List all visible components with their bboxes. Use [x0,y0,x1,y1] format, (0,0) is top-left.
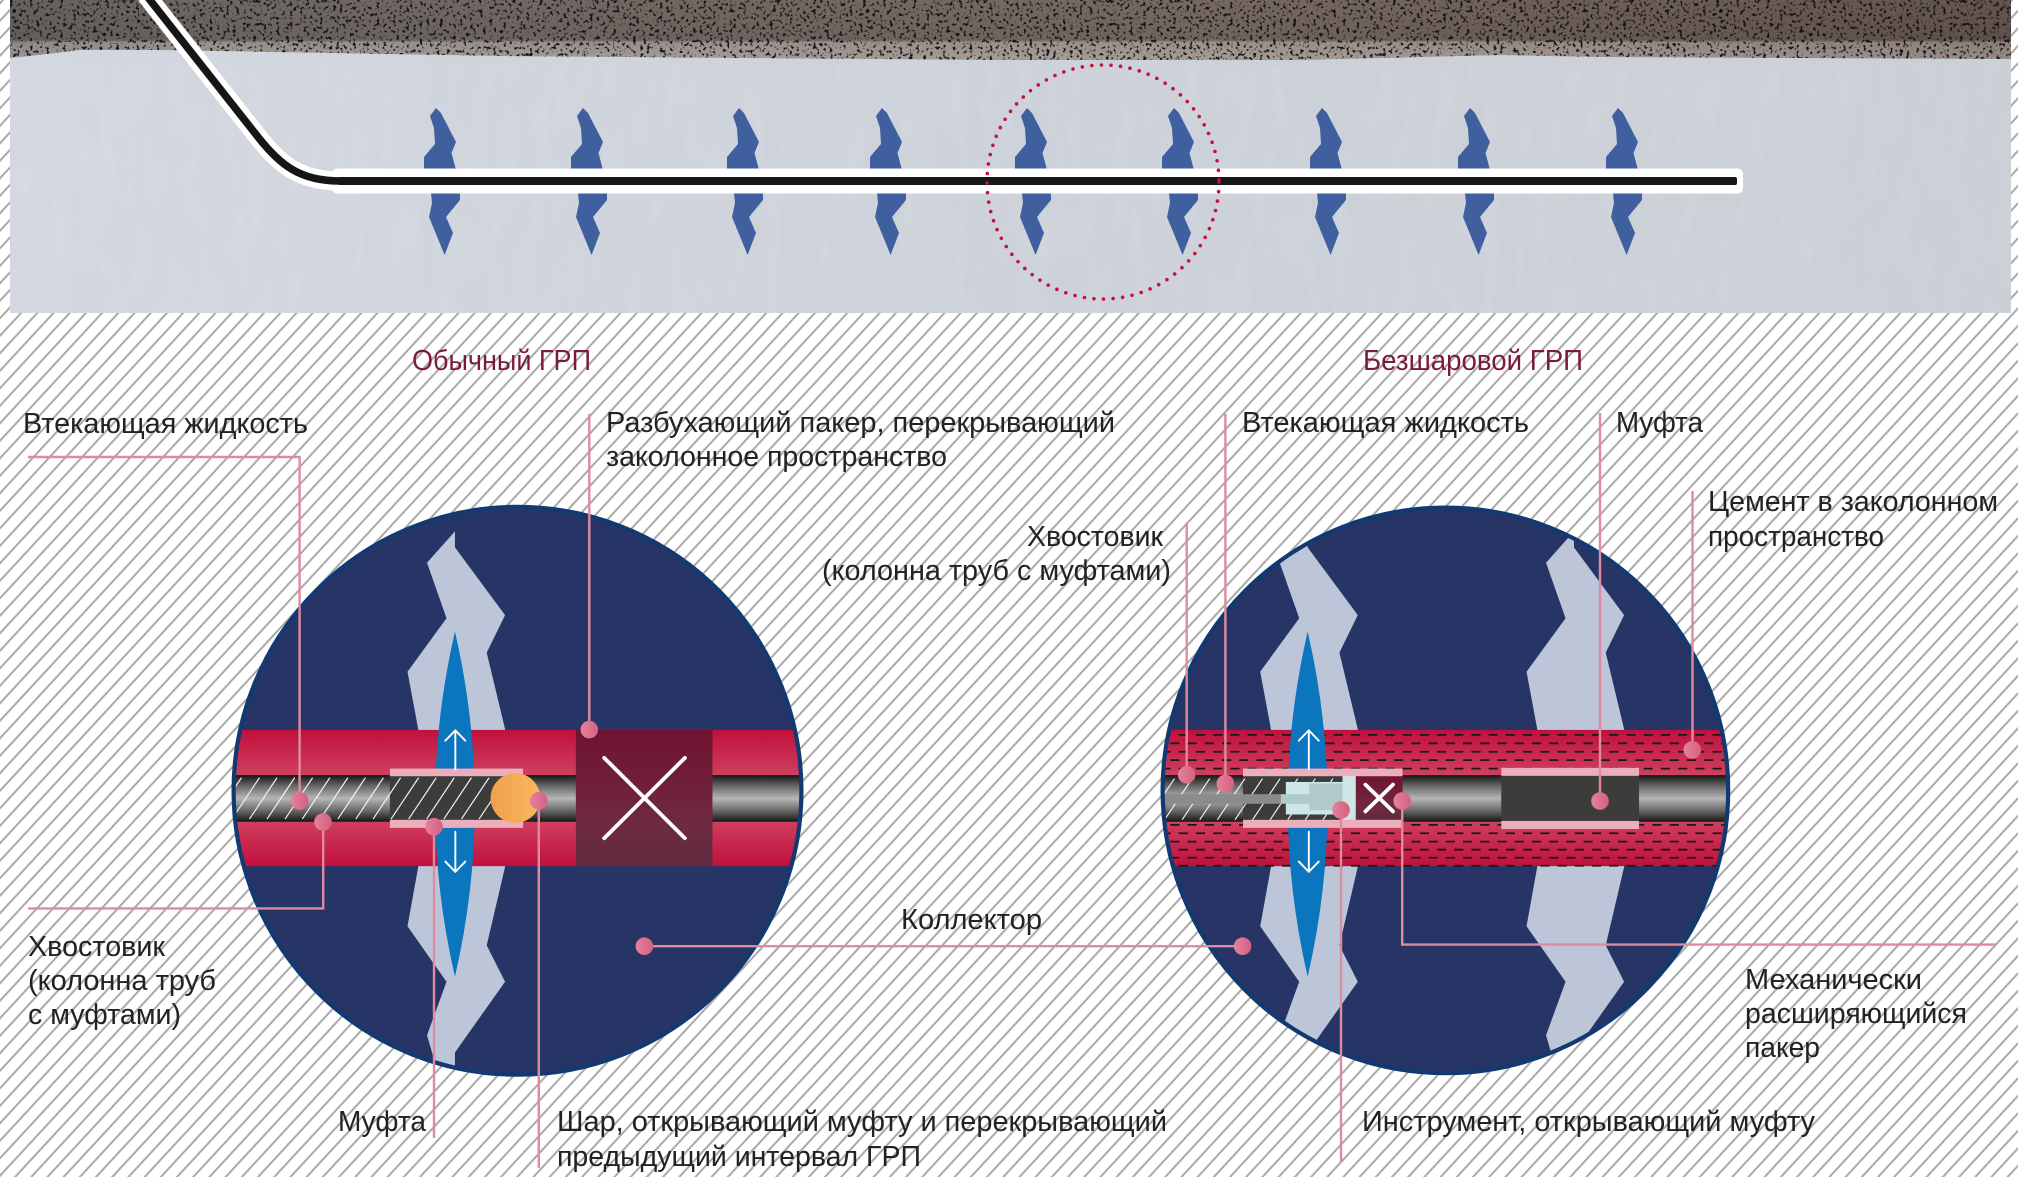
inflow hatching [236,777,491,820]
label: liner, right: Хвостовик [1027,521,1163,553]
label: liner, left: (колонна труб [28,965,216,997]
red annulus band [220,730,817,866]
circle diagram: ball-free frac [1147,508,1747,1073]
dark sleeve interior [390,776,504,820]
leader lines: right diagram [1178,413,1996,1162]
orange ball [491,773,540,823]
label: liner, right: (колонна труб с муфтами) [822,555,1171,587]
steel liner [1150,775,1747,822]
inflow hatching [1164,778,1334,820]
label: mechanical packer [1745,964,1967,1064]
label: cement [1708,486,1998,553]
label: liner, left: с муфтами) [28,999,181,1031]
label: swelling packer: заколонное пространство [606,441,947,473]
label: sleeve, left: Муфта [338,1106,427,1138]
label: mechanical packer: пакер [1745,1032,1820,1064]
sleeve at treated interval [1243,769,1403,828]
label: inflowing fluid, left: Втекающая жидкость [23,408,308,440]
flow arrows [1299,730,1319,872]
coiled tubing bar [1150,794,1282,804]
label: liner, left [28,931,216,1031]
fracture in rock [407,531,505,1066]
sleeve opening tool [1281,775,1356,822]
label: sleeve, right: Муфта [1616,407,1704,439]
label: ball [557,1106,1167,1173]
pink sleeve walls [390,769,523,828]
cemented annulus band [1150,730,1747,866]
label: swelling packer [606,407,1115,473]
fractures along the wellbore [424,108,1642,255]
heading: ball-free frac: Безшаровой ГРП [1363,345,1583,377]
label: cement: пространство [1708,521,1884,553]
label: ball: Шар, открывающий муфту и перекрывающий [557,1106,1167,1138]
swelling packer [576,730,712,866]
blue fracture lens [1288,632,1328,977]
label: mechanical packer: расширяющийся [1745,998,1967,1030]
horizontal well path [146,0,1743,194]
label: mechanical packer: Механически [1745,964,1922,996]
circle outline [1163,508,1728,1073]
light reservoir layer [10,50,2011,313]
circle diagram: conventional frac [214,507,817,1075]
label: reservoir: Коллектор [901,904,1042,936]
fractures in rock [1260,531,1624,1066]
steel liner [220,775,817,822]
dark sleeve interior [1243,775,1356,822]
label: liner, left: Хвостовик [28,931,165,963]
flow arrows [445,730,465,872]
circle outline [234,507,801,1075]
label: cement: Цемент в заколонном [1708,486,1998,518]
rock layer above the reservoir [10,0,2011,64]
label: inflowing fluid, right: Втекающая жидкость [1242,407,1529,439]
mechanical packer [1356,775,1403,821]
label: ball: предыдущий интервал ГРП [557,1141,921,1173]
panel: well cross-section photo [10,0,2011,313]
label: liner, right [822,521,1171,587]
label: swelling packer: Разбухающий пакер, перекрывающий [606,407,1115,439]
leader lines: left diagram [28,414,1243,1168]
label: sleeve opening tool: Инструмент, открывающий муфту [1362,1106,1815,1138]
closed sleeve [1501,768,1639,829]
dotted red highlight circle [987,65,1219,299]
heading: conventional frac: Обычный ГРП [412,345,591,377]
blue fracture lens [435,632,475,977]
